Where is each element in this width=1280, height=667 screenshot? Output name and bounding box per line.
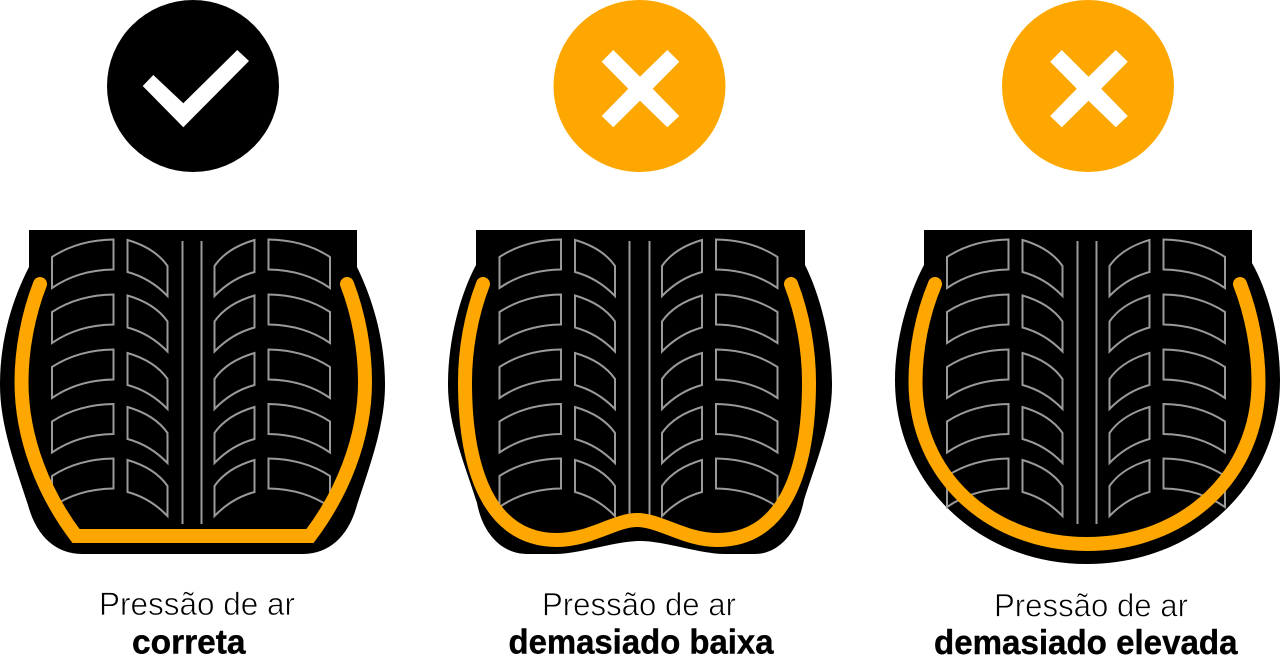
icon: orange circle with cross: [554, 0, 726, 172]
caption: correct pressure: Pressão de ar: [99, 586, 295, 622]
tire cross-section: high pressure: [895, 230, 1280, 564]
caption: correct pressure: correta: [132, 624, 247, 662]
panel: correct air pressure: [0, 0, 385, 662]
caption: correct pressure: [99, 586, 295, 662]
icon: black circle with check mark: [107, 0, 279, 172]
panel: pressure too high: [895, 0, 1280, 662]
caption: high pressure: Pressão de ar: [994, 588, 1188, 624]
inner air line: rounded bulge: [916, 284, 1258, 544]
icon: orange circle with cross: [1002, 0, 1174, 172]
caption: low pressure: demasiado baixa: [508, 624, 775, 662]
caption: high pressure: [934, 588, 1239, 662]
tire cross-section: low pressure: [448, 230, 832, 554]
inner air line: flat bottom: [22, 284, 365, 536]
panel: pressure too low: [448, 0, 832, 662]
tire cross-section: correct pressure: [0, 230, 385, 554]
caption: low pressure: [508, 586, 775, 662]
caption: high pressure: demasiado elevada: [934, 624, 1239, 662]
inner air line: sagging with central hump: [465, 284, 809, 540]
caption: low pressure: Pressão de ar: [542, 586, 736, 622]
